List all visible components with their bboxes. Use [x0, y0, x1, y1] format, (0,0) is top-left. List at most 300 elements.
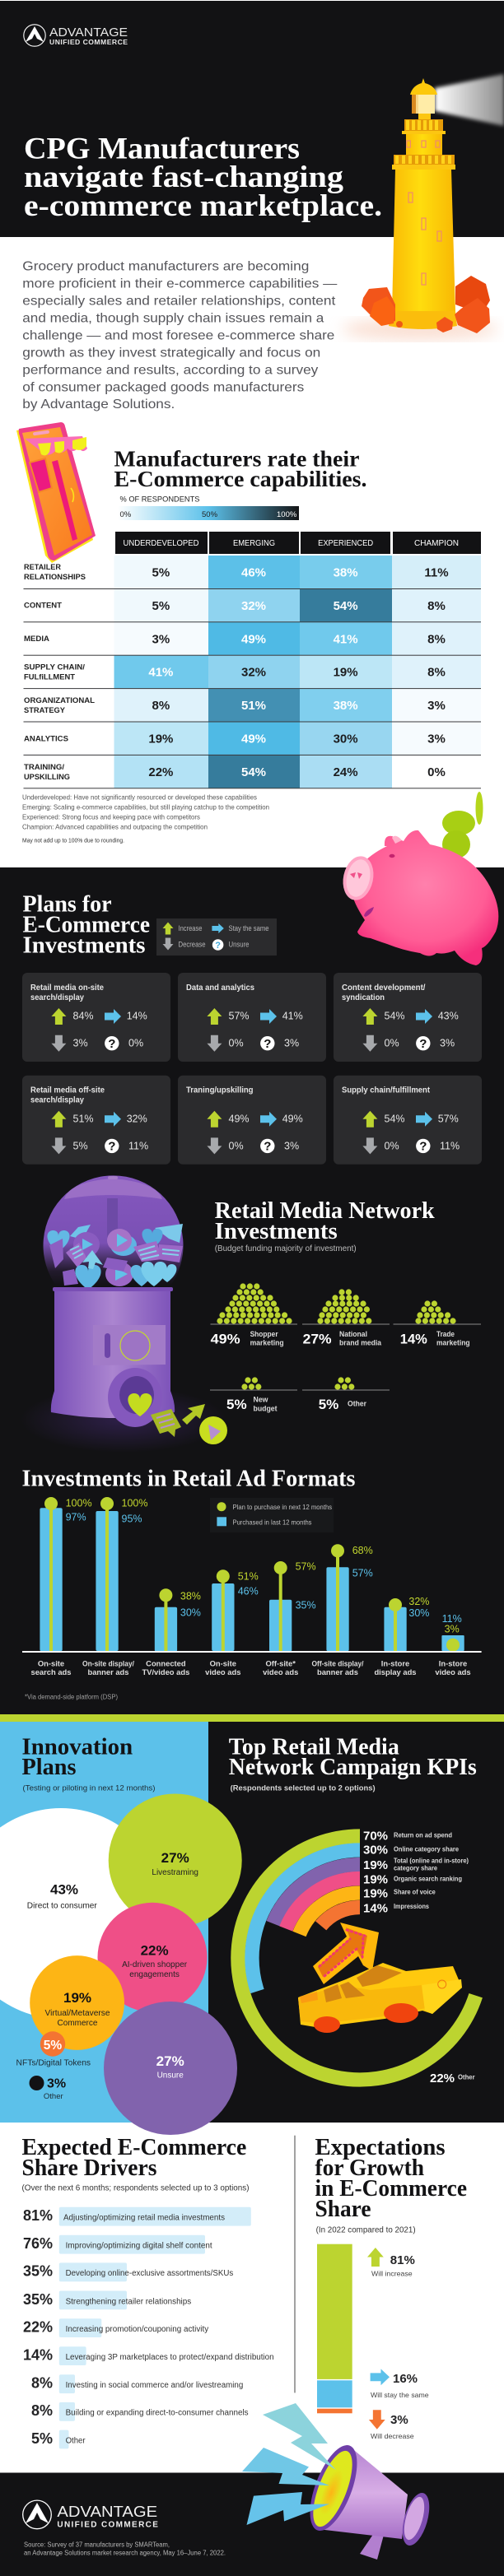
category labels: banner ads: [317, 1667, 358, 1676]
card: retail media off-site: [22, 1076, 170, 1165]
driver labels: Other: [66, 2436, 86, 2445]
card: retail media off-site: ?: [108, 1140, 115, 1154]
category labels: On-site: [38, 1658, 64, 1667]
title: navigate fast-changing: [24, 160, 344, 194]
card: data and analytics: 3%: [284, 1038, 299, 1049]
driver labels: Adjusting/optimizing retail media investments: [63, 2214, 225, 2222]
legend: ?: [215, 941, 221, 951]
KPI labels: Other: [458, 2074, 475, 2081]
heading: [21, 1735, 155, 1793]
percent labels: 8%: [31, 2402, 53, 2419]
row labels: FULfiLLMENT: [24, 672, 75, 681]
value labels: plan: 38%: [180, 1591, 201, 1602]
definitions footnote: May not add up to 100% due to rounding.: [22, 837, 124, 844]
pile: shopper marketing: 49%: [211, 1331, 240, 1346]
card: retail media off-site: Retail media off-site: [30, 1086, 105, 1095]
bubble: virtual/metaverse commerce: 19%: [63, 1990, 91, 2006]
driver labels: [63, 2214, 274, 2445]
legend: % of respondents: 0%: [120, 510, 132, 519]
card: retail media off-site: 32%: [127, 1113, 147, 1124]
table values: 19%: [148, 732, 173, 746]
card: training: [178, 1076, 326, 1165]
card: supply chain: 54%: [384, 1113, 405, 1124]
heading: Expectations: [315, 2135, 446, 2160]
heading: Investments: [215, 1219, 338, 1244]
KPI labels: 14%: [363, 1901, 388, 1915]
bubble: virtual/metaverse commerce: Virtual/Metaverse: [44, 2009, 110, 2018]
heading: Expected E-Commerce: [21, 2135, 246, 2160]
chart legend: Plan to purchase in next 12 months: [232, 1503, 332, 1511]
percent labels: 76%: [23, 2235, 53, 2252]
logo: ADVANTAGE: [57, 2504, 157, 2520]
driver labels: Improving/optimizing digital shelf content: [66, 2242, 212, 2250]
row labels: TRAINING/: [24, 763, 64, 772]
pile: other: 5%: [319, 1397, 338, 1412]
callout: will stay the same: 16%: [393, 2372, 418, 2386]
bubble: virtual/metaverse commerce: Commerce: [58, 2019, 98, 2028]
lime play button: [199, 1416, 227, 1444]
row dividers: [23, 588, 481, 788]
bars: [59, 2207, 251, 2448]
pile: national brand media: National: [339, 1330, 367, 1338]
table values: 8%: [427, 666, 446, 680]
panel: header: [0, 1, 504, 237]
table values: 5%: [152, 599, 170, 613]
table values: 38%: [334, 566, 358, 579]
lime arrow: [182, 1404, 205, 1425]
intro text: of consumer packaged goods manufacturers: [22, 380, 304, 394]
bubble: unsure: Unsure: [157, 2071, 184, 2080]
pile: national brand media: brand media: [339, 1339, 382, 1347]
panel: retail media network investments: [210, 1198, 481, 1412]
title: CPG Manufacturers: [24, 133, 300, 166]
awning: [25, 436, 87, 455]
heading: Share Drivers: [21, 2155, 157, 2181]
card: data and analytics: [178, 973, 326, 1062]
intro text: and media, though supply chain issues remain a: [22, 311, 324, 325]
stacked bar: [317, 2244, 352, 2413]
heading: Investments: [23, 933, 146, 959]
row labels: [24, 563, 95, 782]
row labels: ORGANIZATIONAL: [24, 696, 95, 705]
KPI labels: Organic search ranking: [394, 1876, 462, 1883]
table values: 54%: [241, 765, 266, 779]
card: data and analytics: ?: [264, 1037, 271, 1051]
row labels: SUPPLY CHAIN/: [24, 663, 85, 672]
table values: [148, 566, 449, 779]
value labels: plan: 100%: [66, 1498, 92, 1509]
table values: 32%: [241, 599, 266, 613]
icon: yellow car with arrow sign: [298, 1923, 462, 2033]
callout: will increase: Will increase: [371, 2270, 413, 2278]
card: supply chain: 0%: [384, 1140, 399, 1151]
table values: 5%: [152, 566, 170, 579]
definitions footnote: Experienced: Strong focus and keeping pace with competitors: [22, 814, 200, 821]
table: capability ratings: [23, 532, 481, 788]
definitions footnote: Underdeveloped: Have not significantly resourced or developed these capabilities: [22, 794, 257, 802]
logo: Advantage Unified Commerce: ADVANTAGE: [49, 26, 128, 40]
bubble: unsure: [104, 2002, 237, 2135]
heading: [215, 1198, 435, 1253]
KPI labels: 70%: [363, 1830, 388, 1844]
card: data and analytics: 57%: [229, 1011, 250, 1022]
legend: % of respondents: 100%: [277, 510, 297, 519]
card: content development: 3%: [440, 1038, 455, 1049]
heading: Manufacturers rate their: [114, 447, 360, 472]
panel: plans for e-commerce investments: [22, 892, 482, 1165]
table values: 41%: [334, 632, 358, 646]
row labels: RELATIONSHIPS: [24, 573, 86, 582]
legend: % of respondents: 50%: [202, 510, 218, 519]
pile: new budget: New: [254, 1396, 268, 1404]
card: supply chain: 11%: [440, 1140, 460, 1151]
value labels: plan: 32%: [408, 1596, 429, 1607]
row labels: MEDIA: [24, 635, 49, 644]
table values: 51%: [241, 699, 266, 713]
row labels: ANALYTICS: [24, 735, 69, 744]
heading: (In 2022 compared to 2021): [316, 2226, 416, 2235]
value labels: plan: 51%: [238, 1570, 259, 1582]
percent labels: 14%: [23, 2347, 53, 2364]
row labels: UPSKILLING: [24, 773, 70, 782]
heading: Plans: [21, 1755, 77, 1780]
callout: will stay the same: Will stay the same: [371, 2391, 429, 2399]
card: retail media on-site: 84%: [72, 1011, 94, 1022]
title: [24, 133, 382, 223]
driver labels: Investing in social commerce and/or livestreaming: [66, 2381, 243, 2390]
table values: 49%: [241, 732, 266, 746]
value labels: purchased: 35%: [296, 1600, 316, 1611]
card: retail media off-site: 11%: [128, 1140, 148, 1151]
bubble: livestreaming: Livestraming: [152, 1868, 198, 1877]
row labels: STRATEGY: [24, 706, 66, 715]
percent labels: [23, 2207, 53, 2447]
source: [24, 2541, 226, 2557]
bubble: NFTs: 5%: [44, 2039, 62, 2053]
chart legend: Purchased in last 12 months: [232, 1518, 311, 1526]
pile: other: [302, 1380, 390, 1412]
logo: Advantage Unified Commerce: UNIFIED COMMERCE: [49, 38, 128, 46]
card: retail media on-site: Retail media on-site: [30, 983, 104, 993]
table values: 11%: [424, 566, 449, 579]
table header: CHAMPION: [414, 539, 459, 548]
legend: Stay the same: [229, 924, 269, 932]
value labels: plan: [66, 1498, 460, 1634]
card: content development: 43%: [438, 1011, 459, 1022]
card: supply chain: Supply chain/fulfillment: [342, 1086, 431, 1095]
percent labels: 35%: [23, 2263, 53, 2280]
pile: trade marketing: [394, 1304, 481, 1347]
lightning bolts: [242, 2403, 336, 2525]
panel: footer: [0, 2472, 504, 2576]
value labels: purchased: [66, 1511, 462, 1625]
category labels: display ads: [374, 1667, 417, 1676]
definitions footnote: Emerging: Scaling e-commerce capabilities, but still playing catchup to the competition: [22, 803, 269, 811]
bubble: NFTs: [16, 2031, 91, 2067]
percent labels: 22%: [23, 2319, 53, 2336]
card: retail media on-site: ?: [108, 1037, 115, 1051]
KPI labels: [363, 1830, 475, 2085]
category labels: video ads: [435, 1667, 471, 1676]
category labels: Connected: [146, 1658, 186, 1667]
windows: [407, 141, 441, 285]
card: retail media on-site: 3%: [72, 1038, 88, 1049]
category labels: On-site: [210, 1658, 236, 1667]
percent labels: 8%: [31, 2375, 53, 2392]
KPI labels: Return on ad spend: [394, 1832, 452, 1839]
heading: in E-Commerce: [315, 2176, 467, 2202]
card: content development: ?: [419, 1037, 427, 1051]
cell shading: [114, 556, 481, 788]
table values: 0%: [427, 765, 446, 779]
bubble: direct to consumer: Direct to consumer: [27, 1902, 97, 1911]
lime message bubble: [151, 1409, 181, 1437]
table values: 3%: [427, 732, 446, 746]
panel: investments in retail ad formats: [21, 1467, 482, 1700]
bubble: direct to consumer: 43%: [50, 1882, 78, 1898]
intro text: growth as they invest strategically and focus on: [22, 346, 320, 360]
pile: national brand media: [302, 1292, 390, 1347]
heading: for Growth: [315, 2155, 425, 2181]
source: an Advantage Solutions market research agency, May 16–June 7, 2022.: [24, 2550, 226, 2557]
intro text: challenge — and most foresee e-commerce share: [22, 328, 334, 342]
card: content development: syndication: [342, 993, 385, 1002]
table header: UNDERDEVELOPED: [124, 539, 199, 548]
bubble: virtual/metaverse commerce: [30, 1955, 124, 2050]
heading: (Budget funding majority of investment): [215, 1244, 357, 1253]
lime divider band: [0, 1714, 504, 1722]
value labels: purchased: 30%: [408, 1607, 429, 1619]
pile: national brand media: 27%: [303, 1331, 332, 1346]
category labels: [31, 1658, 471, 1676]
pile: shopper marketing: Shopper: [250, 1330, 278, 1338]
intro text: performance and results, according to a survey: [22, 363, 318, 377]
heading: Network Campaign KPIs: [229, 1755, 477, 1780]
bars: [40, 1508, 464, 1652]
intro text: especially sales and retailer relationships, content: [22, 294, 336, 308]
heading: [23, 892, 150, 959]
card: supply chain: [334, 1076, 482, 1165]
icon: gumball machine: [21, 1175, 227, 1453]
bubble: other: 3%: [47, 2077, 66, 2091]
driver labels: Leveraging 3P marketplaces to protect/expand distribution: [66, 2353, 274, 2362]
legend: Decrease: [178, 941, 206, 949]
bubble: unsure: 27%: [156, 2053, 184, 2069]
callout: will decrease: [369, 2410, 414, 2440]
chart legend: [210, 1498, 334, 1532]
plan markers: [44, 1497, 460, 1652]
table values: 30%: [334, 732, 358, 746]
table values: 38%: [334, 699, 358, 713]
heading: Innovation: [21, 1735, 133, 1760]
heading: E-Commerce capabilities.: [114, 467, 367, 491]
table values: 8%: [427, 599, 446, 613]
category labels: Off-site*: [265, 1658, 296, 1667]
category labels: search ads: [31, 1667, 71, 1676]
table header: EXPERIENCED: [318, 539, 373, 548]
legend: [156, 918, 277, 956]
heading: (Respondents selected up to 2 options): [231, 1784, 376, 1793]
card: training: 49%: [229, 1113, 250, 1124]
card: retail media on-site: [22, 973, 170, 1062]
heading: [229, 1735, 477, 1793]
gumball contents: [47, 1224, 183, 1290]
bubble: other: [30, 2076, 66, 2101]
logo: [23, 2500, 158, 2530]
pile: shopper marketing: marketing: [250, 1339, 284, 1347]
value labels: purchased: 11%: [442, 1613, 462, 1625]
panel: manufacturers rate capabilities: [16, 422, 481, 844]
KPI labels: Total (online and in-store): [394, 1857, 469, 1864]
card: content development: Content development/: [342, 983, 426, 993]
panel: expectations for growth: [315, 2135, 467, 2440]
source: Source: Survey of 37 manufacturers by SMARTeam,: [24, 2541, 170, 2549]
footnote: *Via demand-side platform (DSP): [25, 1693, 118, 1700]
legend: Increase: [178, 924, 203, 932]
table values: 22%: [148, 765, 173, 779]
value labels: plan: 57%: [296, 1560, 316, 1572]
KPI labels: 19%: [363, 1872, 388, 1886]
bubble: direct to consumer: [0, 1808, 166, 2019]
legend: Unsure: [229, 941, 250, 949]
pile: trade marketing: marketing: [436, 1339, 470, 1347]
bubble: AI-driven shopper engagements: AI-driven shopper: [122, 1960, 188, 1969]
intro text: [22, 259, 337, 412]
KPI labels: category share: [394, 1865, 438, 1872]
callout: will decrease: 3%: [390, 2413, 408, 2427]
value labels: plan: 3%: [445, 1623, 460, 1634]
heading: Investments in Retail Ad Formats: [21, 1467, 356, 1492]
table values: 54%: [334, 599, 358, 613]
table values: 3%: [152, 632, 170, 646]
icon: lighthouse: [342, 74, 504, 340]
percent labels: 35%: [23, 2291, 53, 2308]
card: supply chain: ?: [419, 1140, 427, 1154]
card: retail media off-site: search/display: [30, 1096, 84, 1105]
pile: new budget: budget: [254, 1404, 277, 1412]
percent labels: 5%: [31, 2430, 53, 2447]
logo: Advantage Unified Commerce: [24, 25, 128, 46]
KPI labels: 30%: [363, 1844, 388, 1858]
pile: other: Other: [348, 1399, 366, 1407]
card: retail media on-site: search/display: [30, 993, 84, 1002]
category labels: TV/video ads: [142, 1667, 189, 1676]
card: retail media on-site: 0%: [128, 1038, 143, 1049]
table values: 46%: [241, 566, 266, 579]
category labels: On-site display/: [82, 1658, 134, 1667]
value labels: purchased: 46%: [238, 1586, 259, 1597]
pile: shopper marketing: [211, 1286, 297, 1347]
value labels: purchased: 97%: [66, 1511, 86, 1523]
bar chart: [22, 1497, 482, 1676]
callout: will decrease: Will decrease: [371, 2432, 414, 2440]
icon: piggy bank with coins: [339, 792, 498, 965]
KPI labels: Impressions: [394, 1903, 429, 1910]
table values: 3%: [427, 699, 446, 713]
card: training: 49%: [282, 1113, 303, 1124]
KPI labels: Share of voice: [394, 1889, 436, 1896]
icon: phone storefront: [16, 422, 96, 563]
radial bar chart: [238, 1836, 476, 2080]
card: content development: 0%: [384, 1038, 399, 1049]
bubble: other: Other: [44, 2092, 63, 2101]
card: training: 3%: [284, 1140, 299, 1151]
heading: [114, 447, 367, 491]
legend: % of respondents: % OF RESPONDENTS: [120, 495, 199, 505]
table values: 41%: [148, 666, 173, 680]
table values: 24%: [334, 765, 358, 779]
panel: top retail media network campaign KPIs: [208, 1722, 504, 2123]
bubble: livestreaming: 27%: [161, 1850, 189, 1866]
table values: 8%: [427, 632, 446, 646]
intro text: by Advantage Solutions.: [22, 398, 175, 412]
bubble: AI-driven shopper engagements: [97, 1903, 208, 2012]
category labels: banner ads: [87, 1667, 129, 1676]
heading: Retail Media Network: [215, 1198, 435, 1224]
value labels: purchased: 30%: [180, 1607, 201, 1618]
table values: 8%: [152, 699, 170, 713]
category labels: video ads: [205, 1667, 240, 1676]
title: e-commerce marketplace.: [24, 189, 382, 223]
rocks: [362, 276, 490, 333]
heading: (Over the next 6 months; respondents selected up to 3 options): [21, 2183, 249, 2192]
table values: 32%: [241, 666, 266, 680]
legend: % of respondents: [118, 495, 299, 520]
bubble: AI-driven shopper engagements: 22%: [141, 1943, 169, 1959]
coin panel and knob: [93, 1325, 166, 1365]
card: retail media off-site: 5%: [72, 1140, 88, 1151]
driver labels: Increasing promotion/couponing activity: [66, 2325, 208, 2334]
table header: [115, 532, 481, 554]
pile: trade marketing: Trade: [436, 1330, 455, 1338]
card: data and analytics: Data and analytics: [186, 983, 254, 993]
card: supply chain: 57%: [438, 1113, 459, 1124]
category labels: In-store: [381, 1658, 409, 1667]
pile: new budget: 5%: [226, 1397, 247, 1412]
card: training: ?: [264, 1140, 271, 1154]
card: content development: 54%: [384, 1011, 405, 1022]
card: training: 0%: [229, 1140, 244, 1151]
pile: trade marketing: 14%: [400, 1331, 427, 1346]
card: data and analytics: 41%: [282, 1011, 303, 1022]
panel: dark investment background: [0, 867, 504, 1714]
heading: [21, 2135, 249, 2192]
bubble: AI-driven shopper engagements: engagements: [129, 1970, 180, 1979]
KPI labels: Online category share: [394, 1845, 460, 1853]
row labels: RETAILER: [24, 563, 61, 572]
panel: innovation plans: [0, 1722, 242, 2135]
bubble: livestreaming: [109, 1794, 242, 1927]
table header: EMERGING: [233, 539, 275, 548]
card: data and analytics: 0%: [229, 1038, 244, 1049]
KPI labels: 22%: [430, 2071, 455, 2085]
category labels: In-store: [439, 1658, 467, 1667]
logo: UNIFIED COMMERCE: [57, 2520, 158, 2530]
heading: Share: [315, 2197, 371, 2222]
heading: Top Retail Media: [229, 1735, 399, 1760]
KPI labels: 19%: [363, 1858, 388, 1872]
value labels: plan: 100%: [122, 1498, 147, 1509]
card: training: Traning/upskilling: [186, 1086, 254, 1095]
definitions footnote: [22, 794, 269, 844]
definitions footnote: Champion: Advanced capabilities and outpacing the competition: [22, 824, 208, 831]
category labels: Off-site display/: [311, 1658, 364, 1667]
KPI labels: 19%: [363, 1887, 388, 1901]
callout: will stay the same: [371, 2369, 429, 2399]
machine cap: [64, 1176, 162, 1199]
value labels: plan: 68%: [352, 1545, 373, 1556]
card: retail media on-site: 14%: [127, 1011, 147, 1022]
